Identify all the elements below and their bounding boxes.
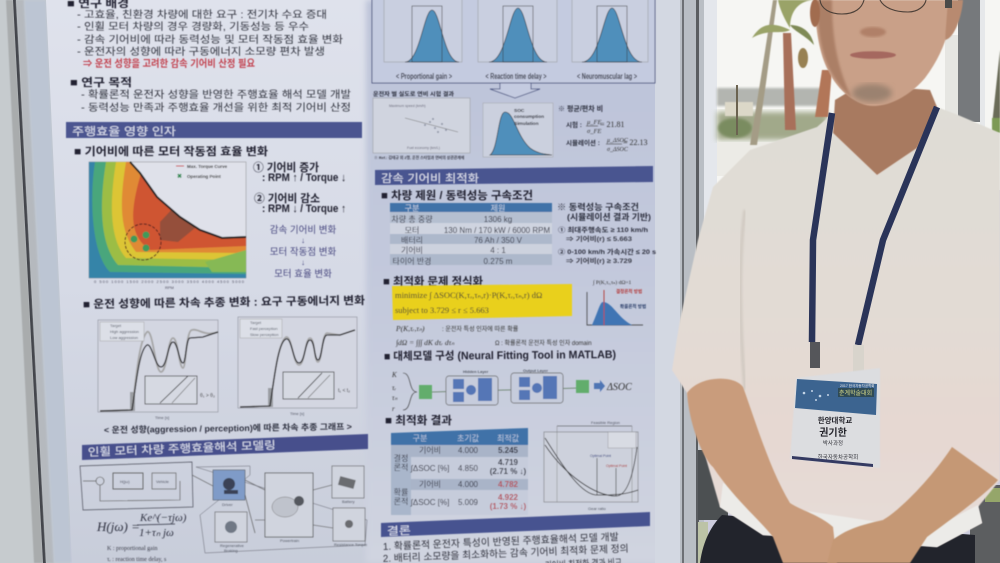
street lamp [736,85,738,135]
driver control block diagram [80,462,193,510]
gear ratio notes: 모터 효율 변화 [274,269,332,280]
neural network diagram: τₙ [392,394,398,402]
gear ratio notes: ↓ [301,236,305,245]
real road test title: 운전자 별 실도로 연비 시험 결과 [373,90,454,98]
performance constraints [557,202,656,265]
lanyard clips [810,342,864,372]
performance constraints: ⇒ 기어비(r) ≥ 3.729 [566,256,632,265]
hidden layer: Hidden Layer [463,369,489,374]
conclusion text: 1. 확률론적 운전자 특성이 반영된 주행효율해석 모델 개발 [383,530,619,553]
yellow objective box: subject to 3.729 ≤ r ≤ 5.663 [395,305,489,315]
palm trees [750,0,1000,145]
histogram: proportional gain: < Proportional gain > [396,72,452,81]
section: research goals: - 동력성능 만족과 주행효율 개선을 위한 최적 기어비 산정 [81,101,351,114]
mean deviation ratio notes: σ_ΔSOC [607,147,629,153]
reference note: ※ Ref.: 김태규 외 2명, 운전 스타일과 연비의 상관관계에 [374,155,465,160]
simulink vehicle model [192,466,368,553]
right poster frame [680,0,717,563]
SOC versus gear ratio chart: Feasible Region [591,420,620,425]
output layer: Output Layer [523,368,548,373]
results table: 4.000 [458,446,479,455]
arrow: histogram panel to SOC simulation [490,83,540,98]
scatter plot: fuel economy: Fuel economy (km/L) [407,146,440,150]
results table: ∫ΔSOC [%] [410,498,449,507]
name badge [790,368,880,468]
subheading: speed tracking: ■ 운전 성향에 따른 차속 추종 변화 : 요구 구동에너지 변화 [83,293,365,311]
vehicle spec table [390,203,552,266]
section: research background: ⇒ 운전 성향을 고려한 감속 기어비 산정 필요 [83,57,255,70]
man [672,0,1000,563]
vehicle spec table: 차량 총 중량 [391,214,433,224]
vehicle spec table: 0.275 m [484,257,513,266]
results table: 5.245 [498,446,519,455]
powertrain block: Powertrain [280,538,299,543]
lower background behind man [698,425,1000,563]
regenerative braking block: Braking [224,548,238,553]
badge banner [795,379,877,415]
regenerative braking block [215,512,247,553]
subheading: surrogate model: ■ 대체모델 구성 (Neural Fitting Tool in MATLAB) [384,347,616,363]
section: research background: - 고효율, 친환경 차량에 대한 요구 : 전기차 수요 증대 [77,8,327,21]
driver transfer function: H(jω) = [96,519,140,534]
mean deviation ratio notes: = 21.81 [600,120,625,129]
neural network diagram [391,368,632,413]
input node [419,385,432,399]
heading bar: conclusion [381,512,650,538]
vehicle spec table: 130 Nm / 170 kW / 6000 RPM [444,226,550,235]
results table: 4.782 [498,480,519,489]
battery block: Battery [342,499,355,504]
results table: 결정 [394,453,408,463]
hair edge [945,0,952,8]
right ear [945,0,963,40]
performance constraints: ① 최대주행속도 ≥ 110 km/h [558,225,648,234]
chart legend: Fast perception [250,326,278,331]
shirt crease near left sleeve [740,210,745,390]
results table: 5.009 [458,498,479,507]
histogram: neuromuscular lag [572,0,648,81]
name badge: 한양대학교 [818,415,852,425]
trousers [700,515,975,563]
section: research background: - 운전자의 성향에 따라 구동에너지 소모량 편차 발생 [77,46,325,58]
speed tracking chart: aggression [98,320,218,420]
glasses [820,0,926,14]
chart legend: Target [110,323,122,328]
badge banner: 2017 한국자동차공학회 [840,383,875,388]
gear ratio notes: : RPM ↑ / Torque ↓ [262,172,346,184]
neural network diagram: ΔSOC [606,382,632,393]
mean deviation ratio notes: = 22.13 [623,138,648,147]
SOC versus gear ratio chart: Gear ratio [588,506,607,511]
results table: 4.850 [458,464,479,473]
name badge: 박사과정 [823,439,843,447]
driver transfer function: Ke^(−τjω) [139,512,187,524]
driver transfer function: τᵣ : reaction time delay, s [107,557,167,563]
heading bar: gear ratio optimization: 감속 기어비 최적화 [381,172,479,185]
SOC consumption histogram: consumption [514,114,544,120]
resistance torque block [333,508,368,547]
results table: (2.71 % ↓) [490,467,527,476]
neural network diagram: K [391,371,397,379]
mean deviation ratio notes: 시뮬레이션 : [566,138,600,147]
yellow objective box: minimize ∫ ΔSOC(K,τᵣ,τₙ,r)·P(K,τᵣ,τₙ,r) dΩ [395,290,542,301]
driver block: Driver [222,502,233,507]
hidden layer [446,369,498,405]
chart legend: Slow perception [250,332,278,337]
formulation notes: P(K,τᵣ,τₙ) [395,324,425,333]
results table [391,428,528,515]
performance constraints: ※ 동력성능 구속조건 [557,202,639,212]
formulation notes: Ω : 확률론적 운전자 특성 인자 domain [495,339,592,347]
name badge: 한국자동차공학회 [818,453,858,461]
section: research goals: - 확률론적 운전자 성향을 반영한 주행효율 해석 모델 개발 [81,88,351,101]
mean deviation ratio notes: ※ 평균/편차 비 [558,104,603,113]
driver transfer function [96,512,187,563]
goatee [852,84,892,102]
formulation notes [395,324,592,347]
vehicle spec table: 76 Ah / 350 V [474,236,523,245]
right window column [945,0,985,127]
vehicle spec table: 타이어 반경 [392,256,432,266]
section: research background: - 인휠 모터 차량의 경우 경량화, 기동성능 등 우수 [77,20,309,33]
vehicle spec table: 모터 [405,226,419,235]
formulation notes: ∫dΩ = ∫∫∫ dK dτᵣ dτₙ [395,338,455,347]
shirt hem lighter [720,483,982,547]
chart legend: High aggression [110,329,139,334]
heading bar: in-wheel motor modelling: 인휠 모터 차량 주행효율해석 모델링 [88,438,276,459]
output layer [511,368,563,403]
wall and frame at left edge [0,0,72,563]
vehicle spec table: 배터리 [401,236,423,245]
heading bar: conclusion: 결론 [387,524,411,538]
operating points circle [125,224,161,260]
subheading: gear ratio motor efficiency: ■ 기어비에 따른 모터 작동점 효율 변화 [74,144,268,158]
performance constraints: (시뮬레이션 결과 기반) [567,212,651,222]
histogram: neuromuscular lag: < Neuromuscular lag > [577,72,637,81]
results table: 4.719 [498,458,519,467]
chart legend: Target [250,320,262,325]
histogram: proportional gain [384,0,462,81]
map legend: Operating Point [187,174,221,179]
left ear [810,0,820,27]
results table: 론적 [394,496,408,506]
results table: 기어비 [419,479,441,489]
face [815,0,952,106]
vehicle spec table: 기어비 [401,245,423,255]
regenerative braking block: Regenerative [220,543,245,548]
performance constraints: ⇒ 기어비(r) ≤ 5.663 [566,234,632,243]
driver control block diagram: H(jω) [120,479,130,484]
section: research background [67,0,343,70]
results table: 초기값 [457,433,480,443]
subheading: optimization result: ■ 최적화 결과 [385,413,452,427]
histogram: reaction time delay: < Reaction time delay > [486,72,547,81]
heading bar: gear ratio optimization [375,166,653,185]
SOC consumption histogram: Simulation [514,121,539,127]
yellow objective box [392,284,572,320]
inset zoom: θ₁ > θ₂ [200,393,215,399]
output node [576,380,589,393]
performance constraints: ② 0-100 km/h 가속시간 ≤ 20 s [558,247,656,256]
arrow to delta SOC [594,380,605,392]
gear ratio notes: 모터 작동점 변화 [270,246,336,258]
map legend: Max. Torque Curve [187,164,228,169]
nose [860,27,886,37]
map legend: ✖ [177,173,182,180]
map legend [176,164,228,180]
powertrain block [265,473,313,543]
badge banner: 춘계학술대회 [839,389,872,397]
scatter plot: fuel economy: Maximum speed (km/h) [389,104,426,108]
mini probability chart: ∫ P(K,τᵣ,τₙ) dΩ=1 [592,279,632,286]
results table: 구분 [413,434,427,443]
gear ratio notes: 감속 기어비 변화 [270,224,336,236]
efficiency heat map [89,162,246,290]
vehicle spec table: 구분 [405,204,419,213]
gear ratio notes: : RPM ↓ / Torque ↑ [262,203,346,215]
neural network diagram: r [392,405,395,413]
right forearm [827,447,998,563]
mean deviation ratio notes: μ_ΔSOC [607,138,629,144]
results table: 최적값 [497,433,520,443]
driver control block diagram: Vehicle [156,479,170,484]
heading bar: driving efficiency factors [66,122,362,138]
face shade [817,0,852,98]
conclusion text [383,530,629,563]
gear ratio notes: ↓ [301,258,305,267]
SOC versus gear ratio chart: Optimal Point [590,454,611,458]
scatter plot: fuel economy [373,98,470,153]
chart legend [100,322,144,341]
results table: 론적 [394,462,408,472]
shirt torso [672,107,1000,547]
graph caption: < 운전 성향(aggression / perception)에 따른 차속 추종 그래프 > [104,422,352,435]
mean deviation ratio notes: σ_FE [587,128,601,135]
neural network diagram: τᵣ [392,384,397,392]
SOC consumption histogram: SOC [514,108,525,114]
heading bar: in-wheel motor modelling [82,434,368,460]
results table: 4.000 [458,480,479,489]
formulation notes: : 운전자 특성 인자에 따른 확률 [442,325,519,333]
heading bar: driving efficiency factors: 주행효율 영향 인자 [72,125,176,138]
driver transfer function: K : proportional gain [107,546,158,552]
chart legend [240,319,282,338]
section: research background: - 감속 기어비에 따라 동력성능 및 모터 작동점 효율 변화 [77,34,343,46]
poster contents [66,0,656,563]
gear ratio notes: ① 기어비 증가 [253,160,319,174]
vehicle spec table: 제원 [491,204,505,213]
mouth [850,51,896,59]
speed tracking chart: aggression: Time [s] [155,415,169,420]
results table: 4.922 [498,493,519,502]
driver block [213,470,245,507]
efficiency heat map: 0 500 1000 1500 2000 2500 3000 3500 4000 4500 5000 [94,279,245,284]
SOC consumption histogram [483,103,553,157]
results table: 기어비 [419,445,441,455]
lanyard [812,107,937,345]
mini probability chart: 결정론적 방법 [616,288,642,295]
mini probability chart: 확률론적 방법 [620,303,646,310]
results table: ∫ΔSOC [%] [410,464,449,473]
mini probability chart [587,279,646,325]
subheading: vehicle specs: ■ 차량 제원 / 동력성능 구속조건 [381,188,533,202]
mean deviation ratio notes [558,104,648,153]
distribution panel: driver parameter histograms [372,0,655,83]
results table: 확률 [394,487,408,497]
mean deviation ratio notes: μ_FE [587,119,601,126]
left forearm [687,379,837,563]
SOC versus gear ratio chart: Optimal Point [606,464,627,468]
poster sheet [46,0,690,563]
speed tracking chart: perception [238,317,357,416]
section: research goals [70,76,351,114]
histogram: reaction time delay [478,0,557,81]
vehicle spec table: 1306 kg [484,215,512,224]
section: research goals: ■ 연구 목적 [70,76,132,89]
results table: (1.73 % ↓) [490,502,527,511]
battery block [332,466,364,504]
window view [717,0,1000,190]
SOC versus gear ratio chart [544,420,638,511]
speed tracking chart: perception: Time [s] [290,411,304,416]
inset zoom: t₁ < t₂ [338,388,350,394]
chart legend: Low aggression [110,335,138,340]
mean deviation ratio notes: 시험 : [566,120,582,129]
subheading: optimization formulation: ■ 최적화 문제 정식화 [383,274,483,288]
gear ratio notes [253,160,346,280]
driver transfer function: 1+τₙ jω [139,527,174,539]
resistance torque block: Resistance Torque [334,542,368,547]
name badge: 권기한 [819,426,847,439]
neck and chest skin [833,85,937,175]
vehicle spec table: 4 : 1 [490,246,506,255]
gear ratio notes: ② 기어비 감소 [254,191,320,205]
efficiency heat map: RPM [165,285,174,290]
